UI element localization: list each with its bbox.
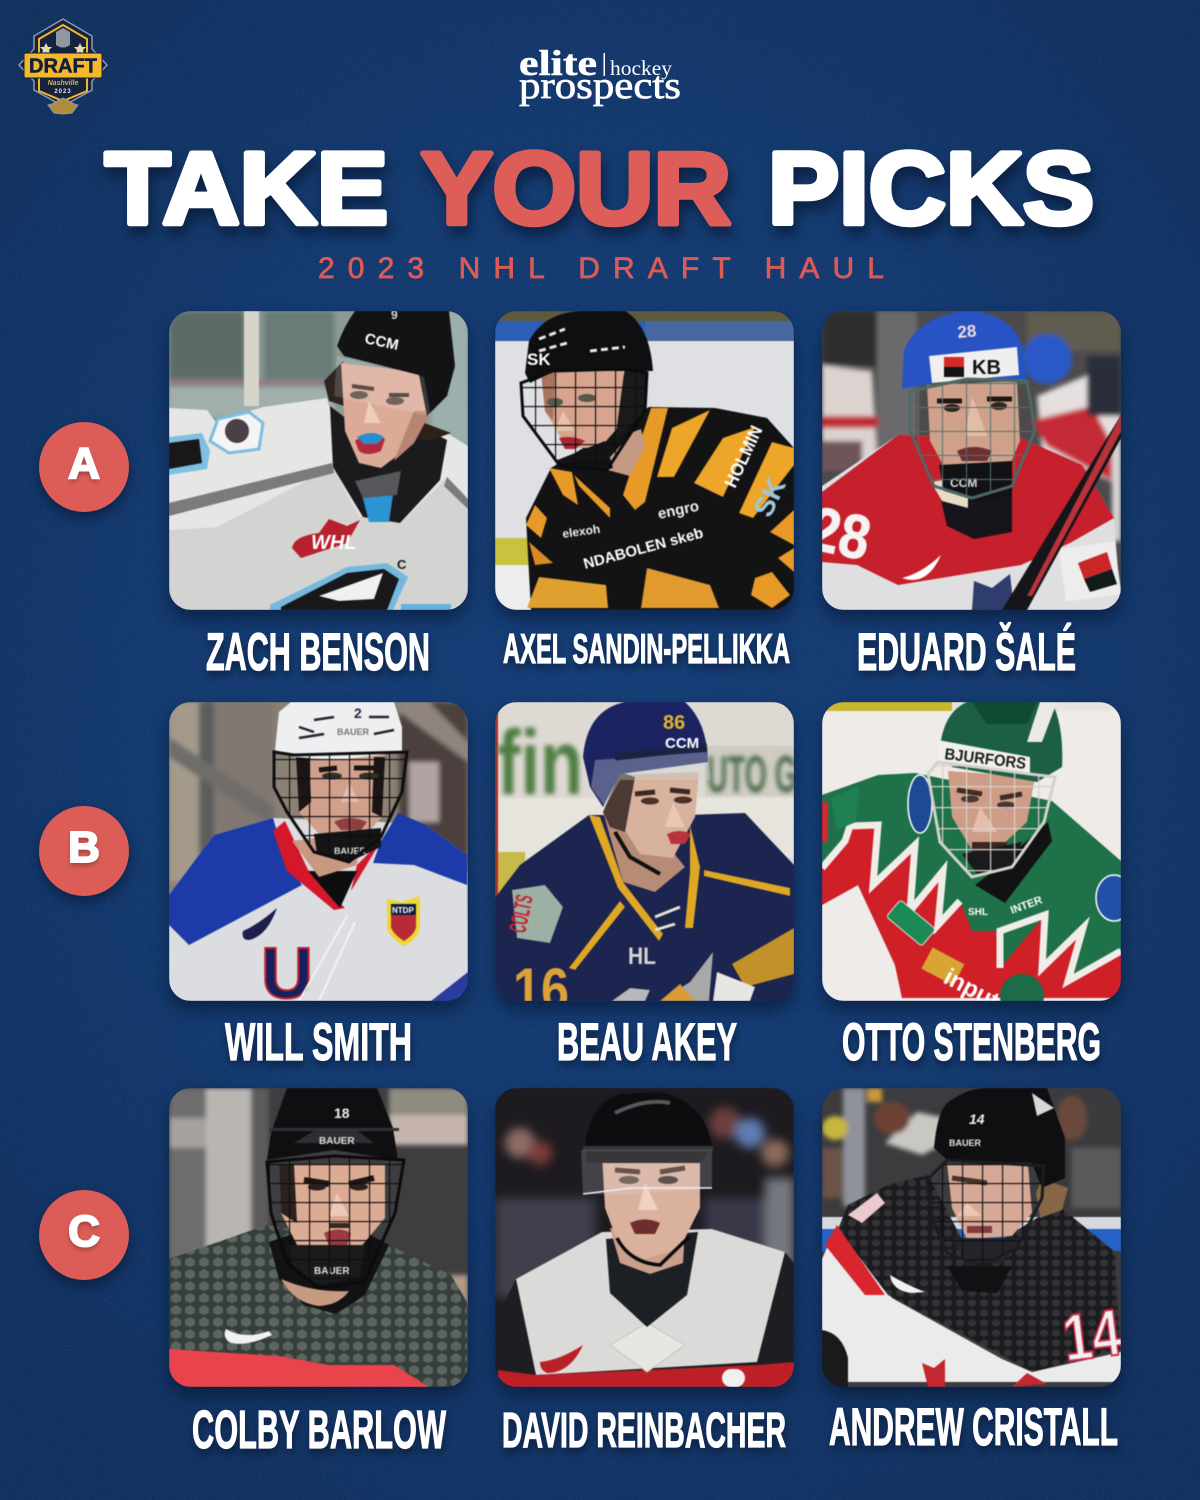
logo: Elite Hockey Prospects: elite (519, 43, 597, 83)
jersey (169, 398, 468, 610)
name: Colby Barlow: COLBY BARLOW (192, 1400, 446, 1460)
name: David Reinbacher: DAVID REINBACHER (502, 1404, 786, 1458)
name: Axel Sandin-Pellikka: AXEL SANDIN-PELLIKKA (503, 625, 790, 672)
head and helmet (274, 702, 407, 877)
jersey (803, 415, 1126, 610)
head and helmet (267, 1088, 404, 1314)
tier badge B: B (68, 823, 100, 872)
head and helmet: CCM (950, 476, 977, 490)
head and helmet: KB (972, 357, 1001, 379)
jersey: NTDP (392, 906, 414, 915)
jersey (526, 407, 794, 610)
tier badge B (39, 806, 129, 896)
photo: Eduard Sale (822, 311, 1121, 610)
logo: Elite Hockey Prospects: hockey (610, 56, 672, 80)
jersey: WHL (311, 532, 357, 554)
tier badge C: C (68, 1207, 100, 1256)
subtitle: 2023 NHL Draft Haul: 2023 NHL DRAFT HAUL (318, 252, 884, 285)
jersey: elexoh (561, 522, 601, 541)
logo: 2023 NHL Draft Nashville badge: Nashville (48, 80, 78, 87)
name: Beau Akey: BEAU AKEY (557, 1013, 737, 1072)
jersey: engro (656, 498, 701, 523)
jersey: SK (747, 473, 792, 522)
jersey: NDABOLEN skeb (582, 525, 705, 573)
name: Will Smith: WILL SMITH (225, 1013, 412, 1072)
jersey (822, 1175, 1125, 1387)
jersey: HOLMIN (720, 422, 767, 491)
head and helmet (324, 308, 455, 523)
head and helmet: BAUER (319, 1136, 355, 1147)
head and helmet: 28 (957, 321, 977, 342)
photo: Otto Stenberg (822, 702, 1121, 1001)
head and helmet: 86 (663, 712, 685, 734)
jersey: C (397, 557, 407, 572)
head and helmet: BJURFORS (944, 746, 1027, 773)
jersey: COLTS (504, 892, 539, 935)
jersey (822, 773, 1132, 1018)
jersey (495, 813, 794, 1023)
head and helmet: BAUER (337, 727, 370, 737)
head and helmet: BAUER (949, 1138, 982, 1148)
jersey: HL (628, 943, 656, 970)
head and helmet: BAUER (314, 1266, 350, 1277)
tier badge A (39, 422, 129, 512)
head and helmet: CCM (363, 330, 400, 354)
photo: Andrew Cristall (822, 1088, 1121, 1387)
logo: Elite Hockey Prospects: prospects (519, 65, 681, 107)
logo: Elite Hockey Prospects (519, 43, 681, 107)
head and helmet: CCM (665, 735, 699, 752)
head and helmet (581, 1092, 713, 1327)
photo: Zach Benson (169, 311, 468, 610)
logo: 2023 NHL Draft Nashville badge: 2023 (54, 89, 72, 95)
head and helmet (927, 1088, 1068, 1293)
jersey (169, 1225, 467, 1387)
jersey (169, 813, 468, 1014)
head and helmet (928, 702, 1062, 877)
photo: Beau Akey (495, 702, 794, 1001)
logo: 2023 NHL Draft Nashville badge (18, 18, 108, 114)
photo: Will Smith (169, 702, 468, 1001)
jersey: INTER (1009, 894, 1044, 917)
logo: 2023 NHL Draft Nashville badge: DRAFT (29, 56, 97, 78)
jersey (495, 1229, 794, 1387)
title: Take Your Picks (102, 132, 1100, 242)
photo: Axel Sandin-Pellikka (495, 311, 794, 610)
head and helmet (521, 311, 653, 476)
name: Zach Benson: ZACH BENSON (206, 623, 430, 682)
head and helmet: 14 (969, 1111, 985, 1127)
photo: David Reinbacher (495, 1088, 794, 1387)
photo: Beau Akey: fin (497, 712, 583, 814)
jersey: SHL (968, 907, 988, 918)
photo: Colby Barlow (169, 1088, 468, 1387)
head and helmet: SK (527, 350, 551, 369)
head and helmet: 2 (354, 705, 362, 721)
tier badge A: A (68, 439, 100, 488)
head and helmet (902, 311, 1035, 501)
tier badge C (39, 1190, 129, 1280)
head and helmet: BAUER (334, 846, 367, 856)
head and helmet (583, 702, 711, 892)
head and helmet: 18 (334, 1105, 350, 1121)
